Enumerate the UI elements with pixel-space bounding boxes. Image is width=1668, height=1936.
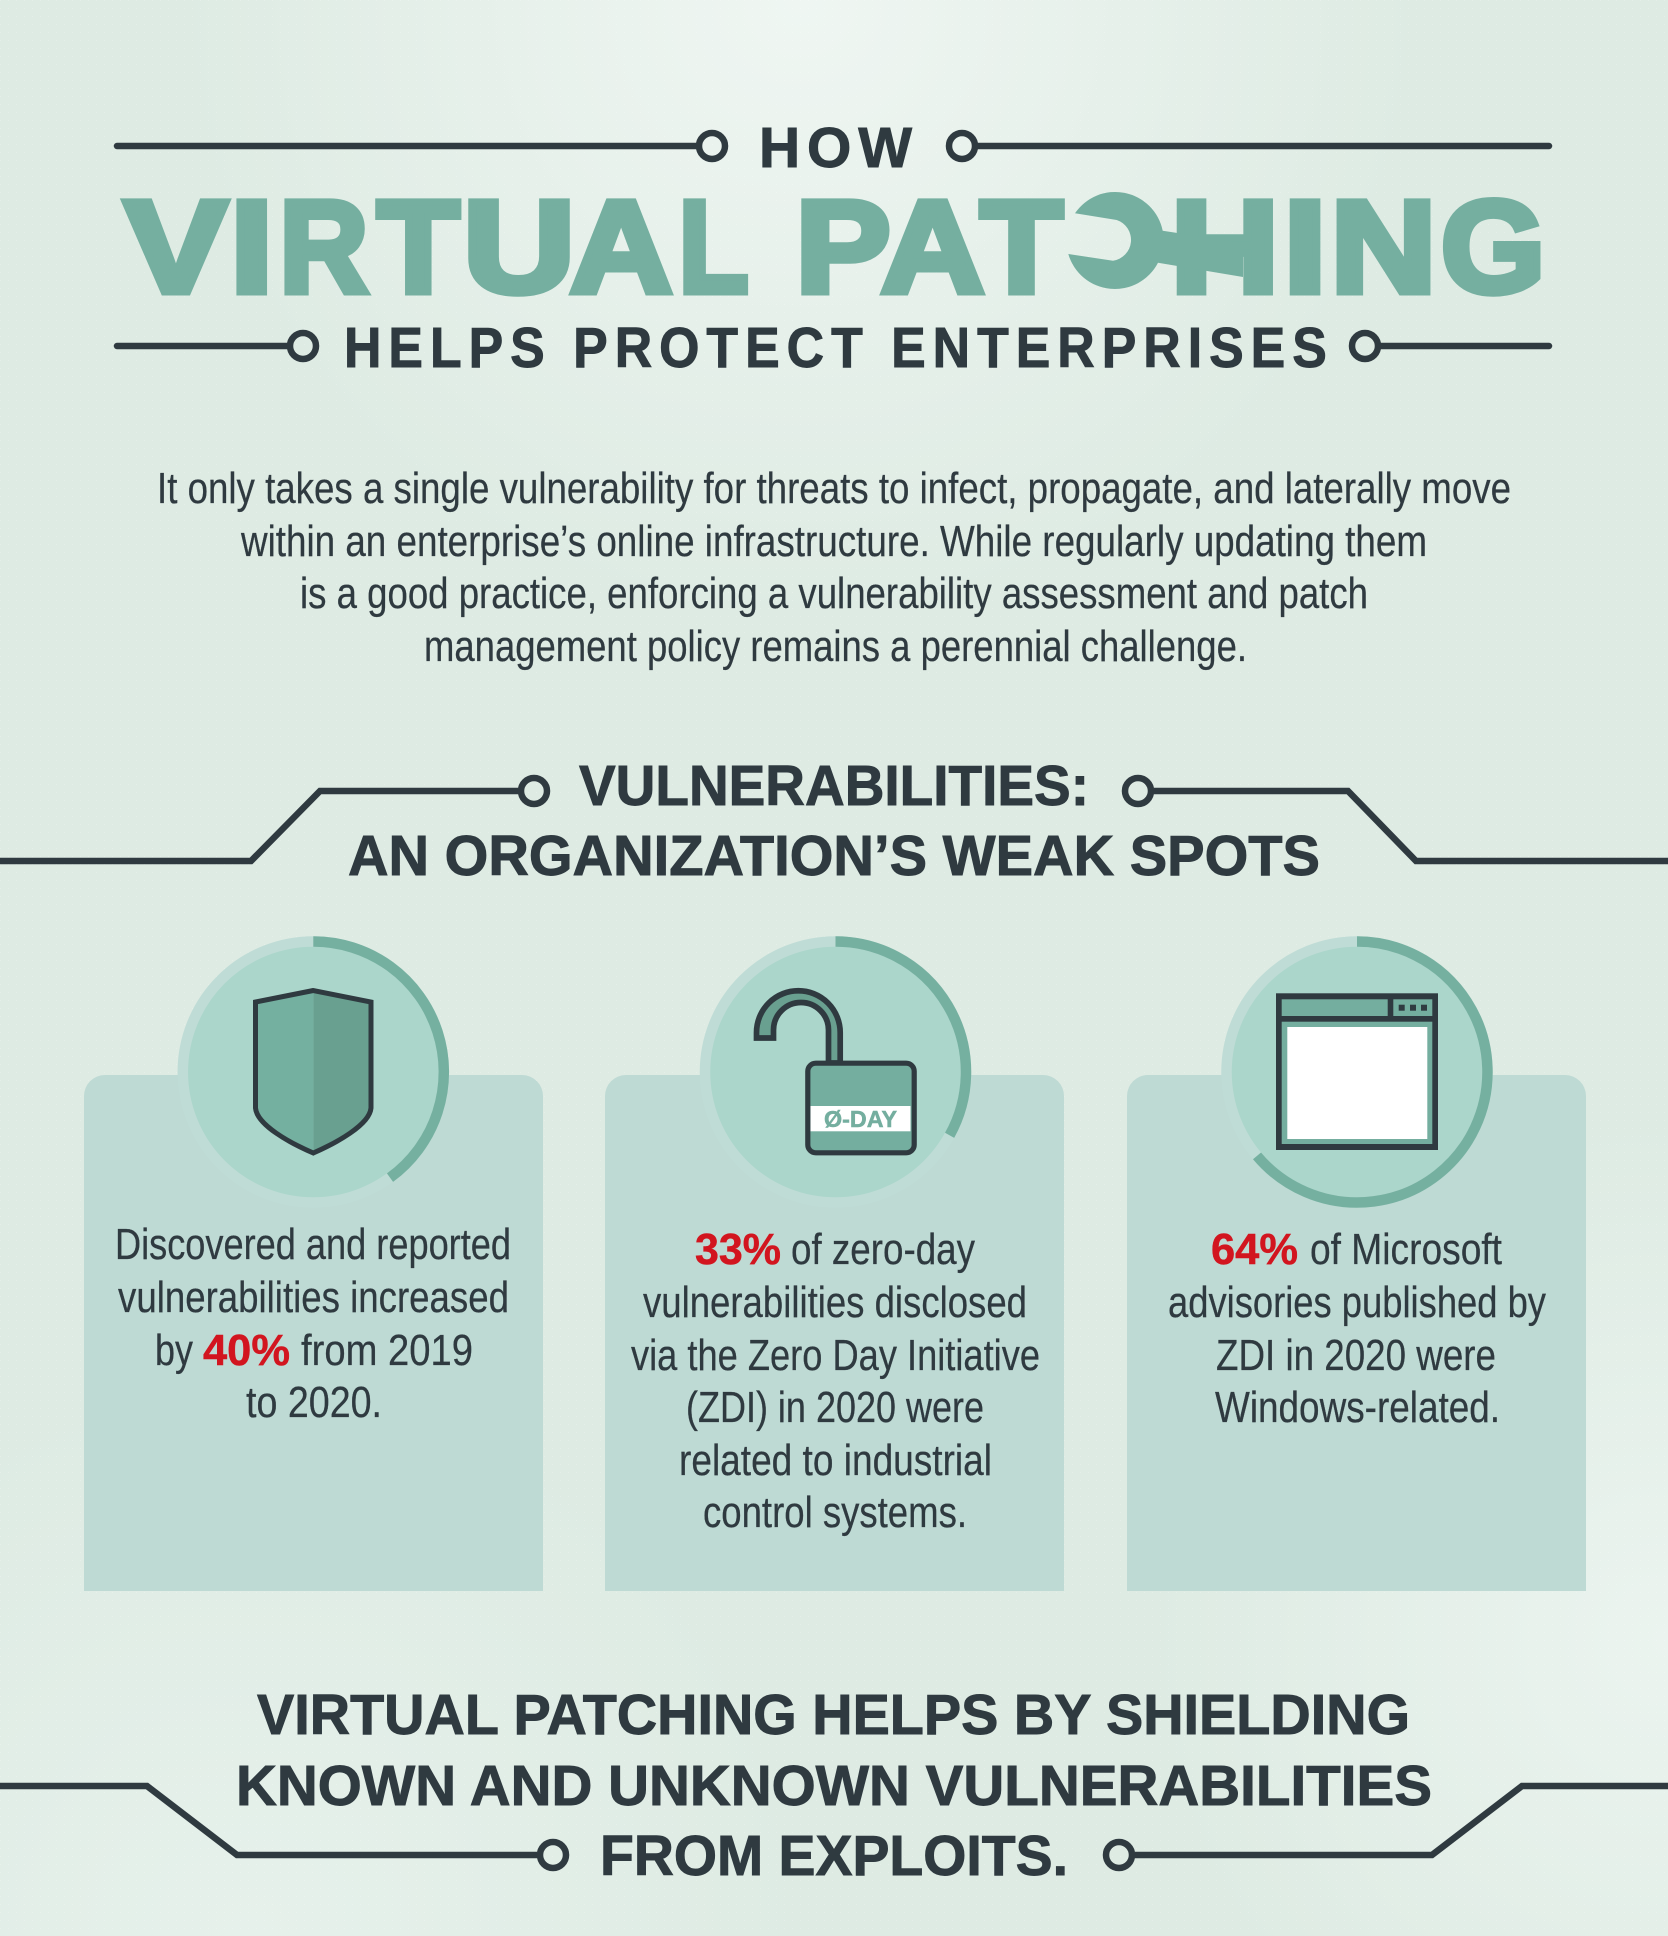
intro paragraph: is a good practice, enforcing a vulnerability assessment and patch [300, 569, 1368, 618]
stat text: 33%: 33% [695, 1225, 781, 1274]
title block [117, 116, 1549, 380]
stat text: 40%: by [155, 1326, 193, 1375]
stat text: 64%: of Microsoft [1310, 1225, 1502, 1274]
title line: VIRTUAL PATCHING: A [570, 173, 672, 320]
padlock shackle [756, 991, 840, 1063]
icon: shield [256, 990, 371, 1153]
conclusion line 1: VIRTUAL PATCHING HELPS BY SHIELDING [257, 1683, 1410, 1747]
stat text: 40% [115, 1220, 511, 1427]
title line: HELPS PROTECT ENTERPRISES: HELPS PROTECT ENTERPRISES [344, 316, 1327, 380]
stat text: 64% [1168, 1225, 1546, 1432]
padlock body [808, 1063, 914, 1153]
title line: HOW: HOW [759, 116, 912, 180]
title line: VIRTUAL PATCHING: L [679, 173, 749, 320]
stat text: 64%: 64% [1211, 1225, 1298, 1274]
title connector: top left [117, 133, 725, 159]
stat text: 40%: from 2019 [301, 1326, 473, 1375]
stat text: 64%: ZDI in 2020 were [1216, 1331, 1496, 1380]
title line: VIRTUAL PATCHING: T [377, 173, 459, 320]
stat text: 40%: Discovered and reported [115, 1220, 511, 1269]
stat text: 64%: advisories published by [1168, 1278, 1546, 1327]
section heading: vulnerabilities [0, 754, 1668, 888]
title connector: bottom left [117, 333, 316, 359]
intro paragraph [157, 464, 1511, 671]
connector: bottom left circuit line [0, 1786, 566, 1868]
stat text: 33%: of zero-day [791, 1225, 975, 1274]
title line: VIRTUAL PATCHING: T [980, 173, 1063, 320]
title connector: bottom right [1352, 333, 1549, 359]
label text: Ø-DAY [824, 1106, 897, 1132]
card background [84, 1075, 543, 1591]
connector: right circuit line [1125, 778, 1668, 861]
progress ring: 33% [705, 942, 966, 1202]
stat text: 64%: Windows-related. [1215, 1383, 1500, 1432]
heading line: VULNERABILITIES: VULNERABILITIES: [579, 754, 1089, 818]
panel: 64% card [1127, 942, 1586, 1591]
title connector: top right [949, 133, 1549, 159]
heading line: weak spots: AN ORGANIZATION’S WEAK SPOTS [348, 824, 1320, 888]
stat text: 40%: to 2020. [246, 1378, 382, 1427]
conclusion line 3: FROM EXPLOITS. [600, 1824, 1068, 1888]
stat text: 33%: (ZDI) in 2020 were [686, 1383, 984, 1432]
stat text: 40%: vulnerabilities increased [118, 1273, 509, 1322]
icon: open padlock with zero-day label [756, 991, 914, 1153]
title line: VIRTUAL PATCHING: A [881, 173, 984, 320]
title line: VIRTUAL PATCHING: N [1331, 173, 1436, 320]
title line: VIRTUAL PATCHING: I [1284, 173, 1327, 320]
connector: left circuit line [0, 778, 547, 861]
icon: browser window [1276, 993, 1438, 1150]
card background [605, 1075, 1064, 1591]
label band [810, 1106, 910, 1131]
title line: VIRTUAL PATCHING: R [280, 173, 368, 320]
title line: VIRTUAL PATCHING: H [1171, 173, 1279, 320]
stat text: 33%: vulnerabilities disclosed [643, 1278, 1027, 1327]
icon: wrench forming the letter C [1068, 192, 1243, 289]
panel: 33% card [605, 942, 1064, 1591]
title line: VIRTUAL PATCHING: V [125, 173, 227, 320]
progress ring: 40% [183, 942, 444, 1202]
card background [1127, 1075, 1586, 1591]
connector: bottom right circuit line [1106, 1786, 1668, 1868]
stat text: 33%: related to industrial [679, 1436, 992, 1485]
stat text: 40%: 40% [203, 1326, 290, 1375]
stat text: 33% [631, 1225, 1040, 1537]
intro paragraph: management policy remains a perennial challenge. [424, 622, 1247, 671]
intro paragraph: within an enterprise’s online infrastructure. While regularly updating them [240, 517, 1427, 566]
conclusion heading [0, 1683, 1668, 1888]
title line: VIRTUAL PATCHING: I [230, 173, 273, 320]
title line: VIRTUAL PATCHING: P [796, 173, 891, 320]
title line: VIRTUAL PATCHING: U [463, 173, 575, 320]
title line: VIRTUAL PATCHING: C [1075, 173, 1170, 320]
stat text: 33%: via the Zero Day Initiative [631, 1331, 1040, 1380]
panel: 40% card [84, 942, 543, 1591]
title line: VIRTUAL PATCHING: G [1441, 173, 1545, 320]
stat text: 33%: control systems. [703, 1488, 967, 1537]
conclusion line 2: KNOWN AND UNKNOWN VULNERABILITIES [236, 1754, 1432, 1818]
progress ring: 64% [1226, 942, 1488, 1202]
